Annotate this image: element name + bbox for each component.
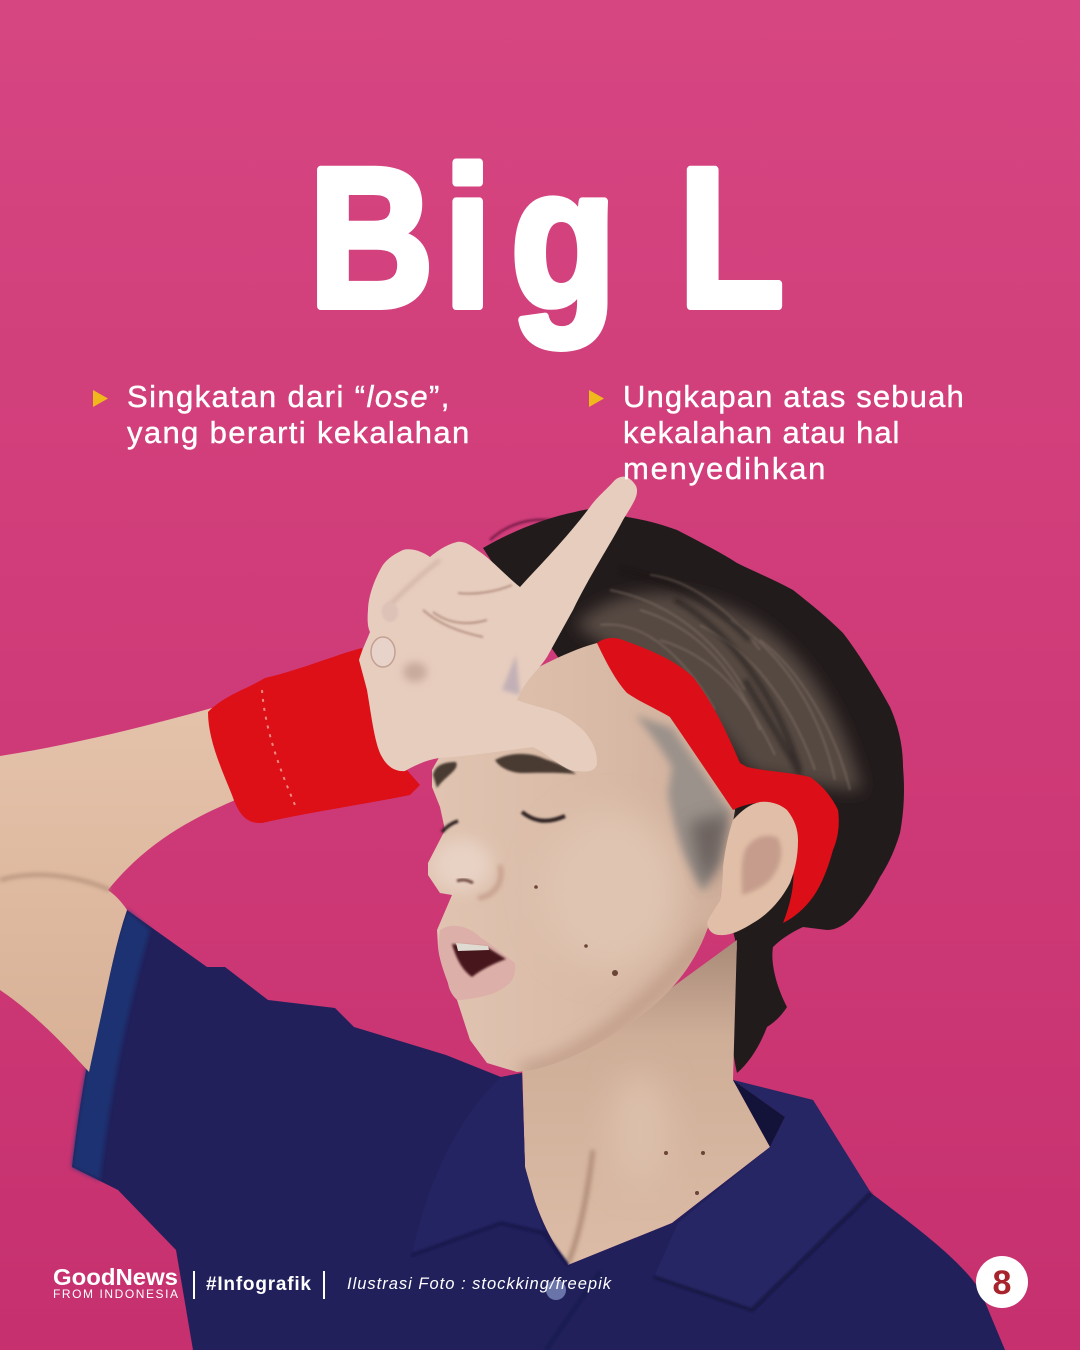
photo: boy making the L gesture on forehead (0, 477, 1005, 1350)
finger shadow (390, 560, 440, 603)
hand (359, 477, 637, 772)
bullet text: Ungkapan atas sebuah (623, 379, 965, 414)
title: Big L (309, 128, 784, 349)
bullet text: Singkatan dari “lose”, (127, 379, 451, 414)
palm shadow (403, 662, 427, 682)
hashtag: #Infografik (206, 1274, 311, 1295)
logo: GoodNews (53, 1264, 178, 1290)
finger nails (382, 602, 398, 622)
hair strands (600, 575, 850, 790)
shirt (72, 910, 1005, 1350)
footer (53, 1264, 612, 1301)
nostril (457, 880, 473, 883)
wristband (208, 648, 420, 823)
photo credit: Ilustrasi Foto : stockking/freepik (347, 1275, 612, 1293)
bullet text: menyedihkan (623, 451, 827, 486)
nose highlight (432, 839, 492, 891)
nose wing shadow (478, 865, 501, 898)
face (428, 643, 735, 1072)
neck (522, 940, 770, 1265)
sleeve cuff (72, 910, 150, 1180)
logo (53, 1264, 178, 1301)
logo: FROM INDONESIA (53, 1287, 178, 1301)
divider (193, 1271, 195, 1299)
page number: 8 (993, 1264, 1011, 1302)
arm (0, 708, 240, 1072)
headband (597, 638, 839, 923)
closed eyes (522, 812, 565, 821)
hair sheen (575, 593, 862, 790)
divider (323, 1271, 325, 1299)
marker (93, 390, 108, 407)
page number (976, 1256, 1028, 1308)
shirt button (546, 1280, 566, 1300)
ear (707, 802, 798, 935)
collar right (654, 1080, 871, 1310)
hair (483, 509, 904, 1073)
cheek highlight (562, 818, 682, 962)
marker (589, 390, 604, 407)
beauty marks (534, 885, 538, 889)
grey temple hair (635, 715, 730, 892)
eyebrows (495, 754, 576, 774)
finger fold lines (423, 585, 512, 637)
temple dark hair (690, 814, 730, 888)
bullet text: kekalahan atau hal (623, 415, 900, 450)
collar left (412, 1073, 544, 1255)
bullet right (589, 379, 965, 486)
bullet text: yang berarti kekalahan (127, 415, 471, 450)
jaw shadow (520, 930, 710, 1072)
bullet left (93, 379, 471, 450)
back collar (733, 1080, 785, 1147)
mouth (438, 926, 515, 1000)
thumb base wrinkle (502, 655, 520, 695)
